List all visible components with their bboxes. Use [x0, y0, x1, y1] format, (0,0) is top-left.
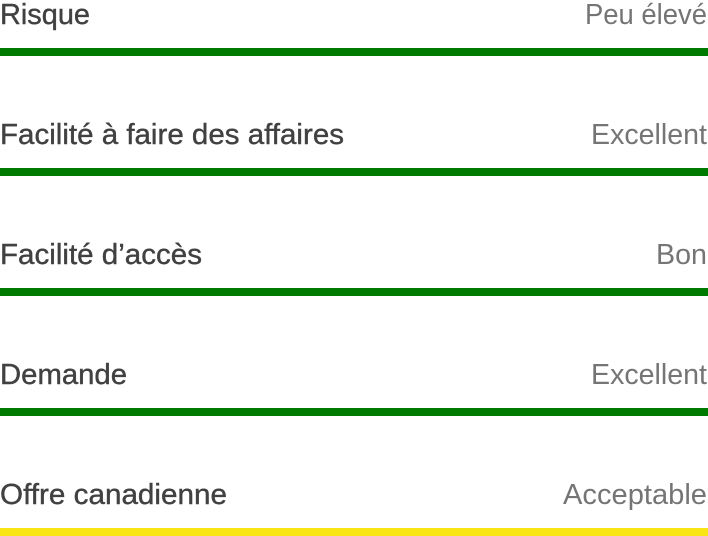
label: Facilité à faire des affaires: Facilité à faire des affaires: [0, 119, 344, 151]
row: Facilité à faire des affaires: [0, 119, 708, 176]
yellow rating bar: [0, 528, 708, 536]
green rating bar: [0, 168, 708, 176]
value: Acceptable: Acceptable: [563, 479, 707, 511]
green rating bar: [0, 48, 708, 56]
label: Demande: Demande: [0, 359, 127, 391]
label: Facilité d'accès: Facilité d’accès: [0, 239, 202, 271]
row: Risque: [0, 0, 708, 56]
value: Bon: Bon: [656, 239, 707, 271]
value: Excellent: Excellent: [591, 119, 707, 151]
row: Offre canadienne: [0, 479, 708, 536]
label: Offre canadienne: Offre canadienne: [0, 479, 227, 511]
green rating bar: [0, 288, 708, 296]
row: Demande: [0, 359, 708, 416]
value: Excellent: Excellent: [591, 359, 707, 391]
green rating bar: [0, 408, 708, 416]
row: Facilité d'accès: [0, 239, 708, 296]
